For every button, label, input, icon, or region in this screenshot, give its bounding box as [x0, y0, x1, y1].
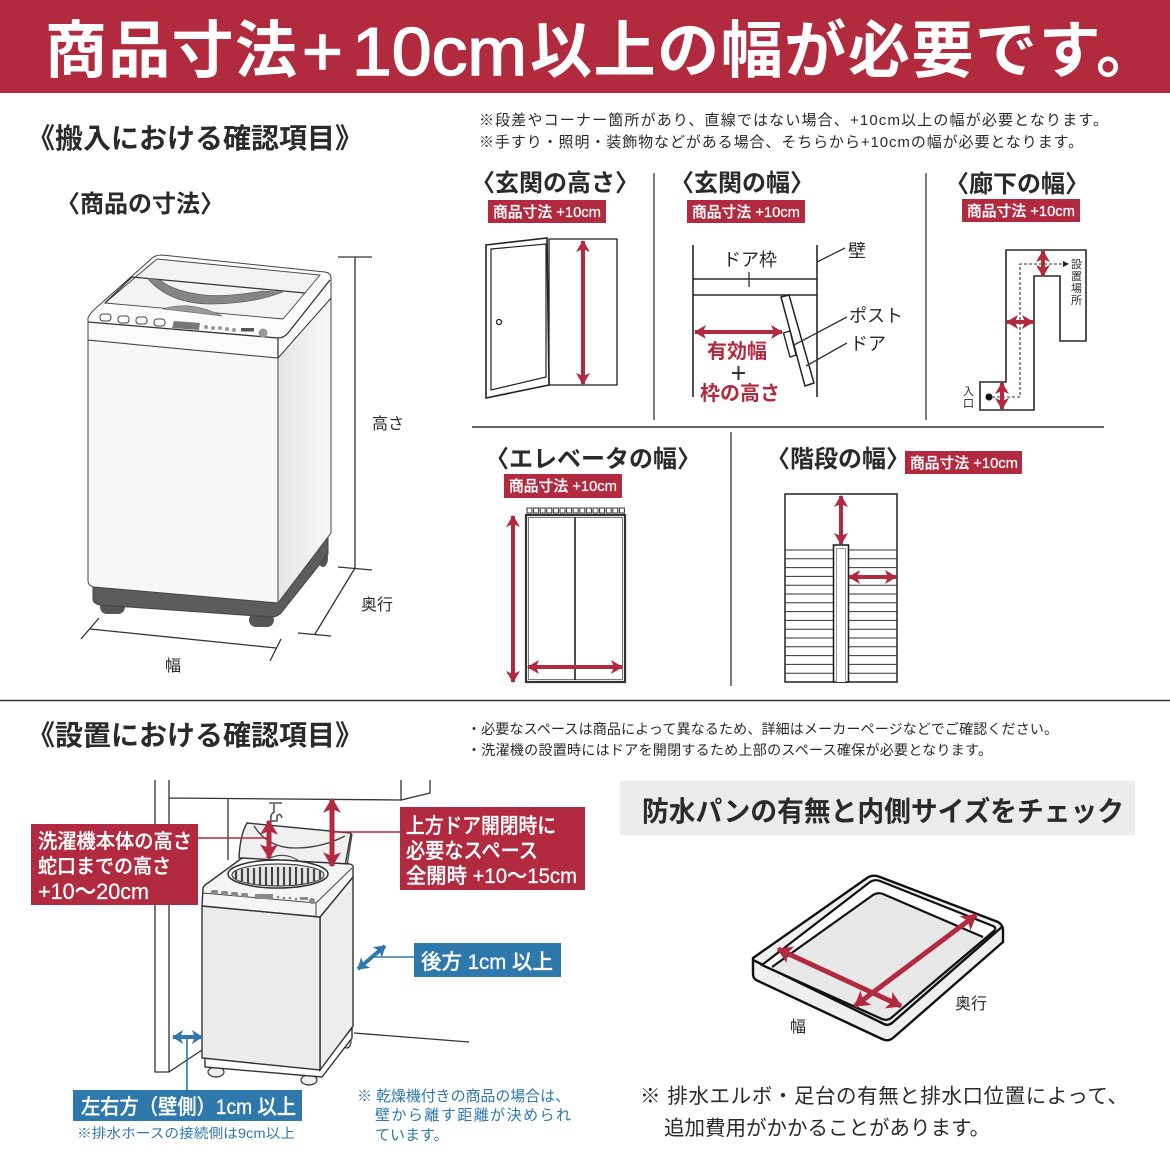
callout: top door clearance: 全開時 +10～15cm	[406, 865, 577, 888]
delivery notes	[479, 112, 1108, 151]
header banner	[0, 0, 1170, 93]
callout: height to faucet: 蛇口までの高さ	[38, 855, 171, 878]
effective width text: 枠の高さ	[700, 382, 780, 405]
pan rim	[762, 880, 995, 1020]
label: installation place: 所	[1071, 293, 1082, 307]
machine front	[202, 906, 320, 1070]
heading: 〈廊下の幅〉	[945, 171, 1089, 198]
panel: entrance height	[471, 170, 639, 398]
heading: 〈玄関の高さ〉	[471, 170, 639, 197]
note: dryer models: 壁から離す距離が決められ	[375, 1107, 571, 1124]
door plan drawing	[693, 245, 847, 397]
callout: height to faucet	[31, 821, 270, 905]
badge: 商品寸法 +10cm	[493, 204, 601, 221]
header banner: 商品寸法	[45, 17, 297, 86]
heading band: waterproof pan: 防水パンの有無と内側サイズをチェック	[642, 795, 1124, 827]
stairs plan	[785, 494, 897, 682]
open lid	[239, 823, 351, 866]
note: additional costs	[640, 1085, 1128, 1140]
door drawing	[486, 238, 617, 398]
illustration: waterproof pan	[753, 876, 1003, 1040]
label: installation place: 場	[1071, 282, 1082, 295]
arrow: side	[173, 1035, 202, 1039]
floor indicator	[527, 508, 624, 513]
installation notes: ・洗濯機の設置時にはドアを開閉するため上部のスペース確保が必要となります。	[467, 742, 992, 758]
depth dimension	[298, 568, 355, 636]
label: installation place: 設	[1071, 258, 1082, 271]
callout: height to faucet: +10～20cm	[38, 879, 149, 904]
panel: corridor width	[945, 171, 1089, 410]
note: dryer models	[357, 1088, 571, 1144]
header banner: 以上の幅が必要です。	[530, 17, 1158, 86]
pan tray	[762, 893, 994, 1020]
label: door frame: ドア枠	[723, 250, 777, 270]
header banner: +	[302, 12, 343, 90]
dividers	[654, 173, 926, 686]
lid handle	[147, 278, 283, 304]
badge	[687, 200, 805, 223]
height arrow	[581, 241, 585, 384]
label: installation place	[1071, 258, 1082, 307]
heading band: waterproof pan	[620, 781, 1135, 835]
dashed route	[986, 261, 1069, 400]
control panel	[211, 890, 315, 904]
width dimension	[81, 618, 281, 661]
faucet	[269, 803, 282, 821]
badge	[962, 199, 1080, 222]
callout: top door clearance	[332, 799, 585, 890]
wall and cabinet	[155, 780, 469, 1072]
heading: product dimensions: 〈商品の寸法〉	[56, 191, 224, 218]
note: additional costs: ※ 排水エルボ・足台の有無と排水口位置によって、	[640, 1085, 1128, 1108]
control panel	[100, 314, 165, 326]
callout: top door clearance: 上方ドア開閉時に	[406, 815, 556, 838]
header banner: 10cm	[352, 14, 527, 90]
badge: 商品寸法 +10cm	[509, 478, 617, 495]
badge	[488, 200, 606, 223]
delivery notes: ※段差やコーナー箇所があり、直線ではない場合、+10cm以上の幅が必要となります。	[479, 112, 1108, 129]
badge	[905, 451, 1022, 474]
corridor arrows	[1002, 251, 1043, 409]
heading: installation check items: 《設置における確認項目》	[27, 720, 363, 751]
panel: elevator width	[485, 446, 701, 682]
arrow: rear	[358, 946, 385, 969]
badge	[504, 474, 622, 498]
effective width arrow	[695, 330, 782, 334]
label: width: 幅	[165, 657, 181, 675]
arrow: to faucet	[266, 821, 272, 858]
callout: rear clearance: 後方 1cm 以上	[421, 951, 553, 974]
label: width: 幅	[790, 1018, 806, 1036]
badge: 商品寸法 +10cm	[967, 203, 1075, 220]
section divider	[0, 700, 1170, 702]
machine base	[93, 532, 328, 617]
arrow: door clearance	[330, 799, 334, 866]
note: dryer models: ※ 乾燥機付きの商品の場合は、	[357, 1088, 570, 1105]
height dimension	[338, 257, 372, 570]
label: post: ポスト	[849, 306, 903, 326]
machine side	[320, 877, 353, 1070]
elevator arrows	[513, 516, 622, 682]
machine feet	[100, 549, 328, 627]
label: wall: 壁	[848, 241, 866, 261]
callout: side clearance: 左右方（壁側）1cm 以上	[81, 1096, 296, 1119]
note: additional costs: 追加費用がかかることがあります。	[664, 1117, 990, 1140]
stairs arrows	[841, 496, 896, 577]
badge: 商品寸法 +10cm	[910, 455, 1018, 472]
callout: side clearance	[73, 1037, 302, 1141]
installation notes	[467, 721, 1058, 758]
label: entrance	[963, 386, 974, 410]
heading: 〈エレベータの幅〉	[485, 446, 701, 473]
machine top	[202, 858, 353, 917]
callout: top door clearance: 必要なスペース	[406, 840, 538, 863]
panel: stairs width	[766, 446, 1022, 682]
callout: rear clearance	[358, 943, 561, 977]
label: depth: 奥行	[361, 596, 393, 614]
illustration: washing machine with dimensions	[81, 255, 404, 675]
note: dryer models: ています。	[375, 1127, 449, 1144]
installation notes: ・必要なスペースは商品によって異なるため、詳細はメーカーページなどでご確認ください。	[467, 721, 1058, 737]
label: installation place: 置	[1071, 270, 1082, 283]
drum	[228, 860, 328, 888]
effective width text: 有効幅	[707, 340, 767, 363]
heading: 〈階段の幅〉	[766, 446, 910, 473]
label: height: 高さ	[372, 415, 404, 433]
machine side	[278, 298, 331, 603]
label: door: ドア	[850, 334, 886, 354]
corridor plan	[980, 250, 1086, 410]
pan body	[753, 876, 1003, 1040]
effective width text	[700, 340, 780, 405]
illustration: installed washing machine	[155, 780, 469, 1085]
label: entrance: 口	[963, 398, 974, 410]
label: entrance: 入	[963, 386, 974, 398]
badge: 商品寸法 +10cm	[692, 204, 800, 221]
heading: delivery check items: 《搬入における確認項目》	[27, 123, 363, 154]
machine top	[88, 255, 331, 358]
label: depth: 奥行	[955, 995, 987, 1013]
pan arrows	[778, 915, 976, 1006]
elevator doors	[526, 515, 625, 682]
delivery notes: ※手すり・照明・装飾物などがある場合、そちらから+10cmの幅が必要となります。	[479, 134, 1083, 151]
callout: height to faucet: 洗濯機本体の高さ	[38, 830, 192, 853]
panel: entrance width	[670, 170, 903, 405]
feet and base	[208, 1034, 351, 1085]
heading: 〈玄関の幅〉	[670, 170, 814, 197]
machine front	[88, 340, 278, 603]
note: drain hose side: ※排水ホースの接続側は9cm以上	[77, 1125, 295, 1141]
